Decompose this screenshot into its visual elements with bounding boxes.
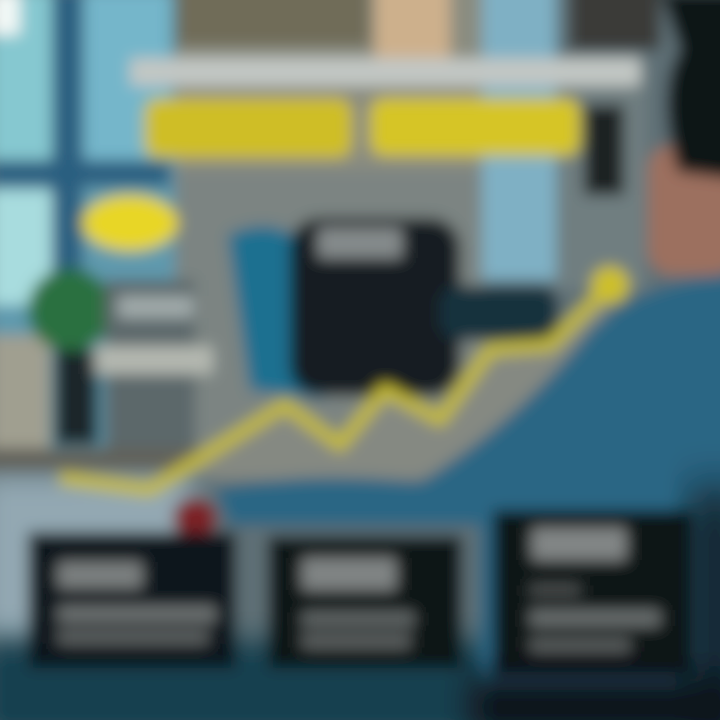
floor [0,448,500,720]
bottom right shadow [470,490,720,720]
stat card 3 [493,510,693,675]
window [0,0,175,460]
stat card 1 [28,532,236,668]
yellow headline [144,98,580,158]
chart end marker [591,266,629,304]
sweater [215,275,720,720]
lamp [82,195,178,251]
armchair [228,218,558,400]
line chart [60,266,629,490]
side text block [95,280,213,450]
face [648,145,720,275]
banner title strip [130,58,640,86]
hand [173,498,217,538]
chart line [60,285,610,490]
person [173,0,720,720]
plant [28,268,112,445]
hair [660,0,720,180]
chart area [190,285,610,480]
stat card 2 [268,536,462,668]
